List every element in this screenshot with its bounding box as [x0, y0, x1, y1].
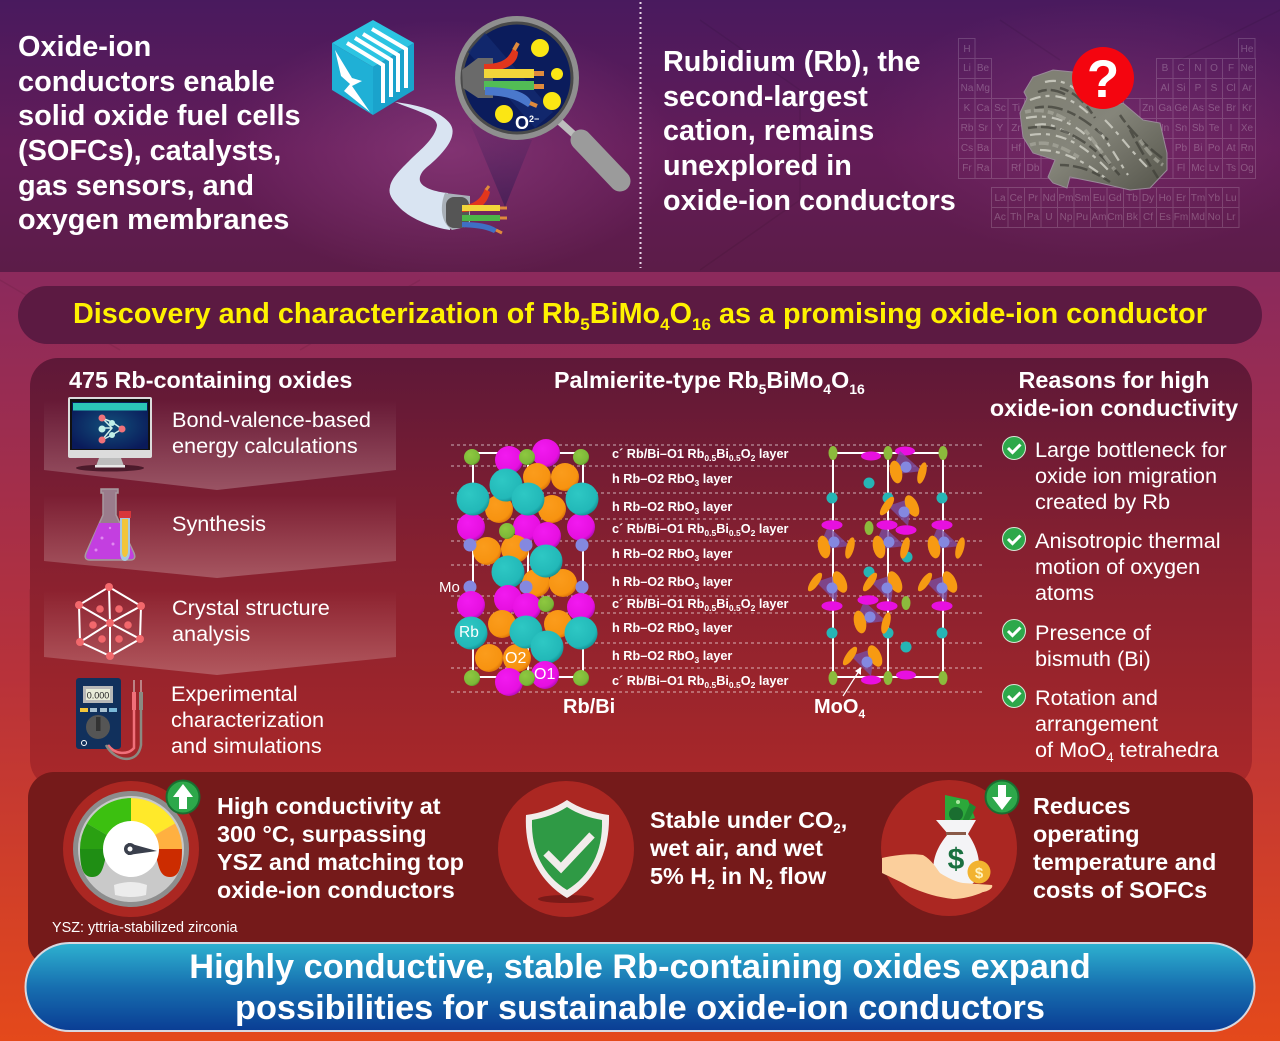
- periodic table: Po: [1208, 143, 1221, 154]
- periodic table: Ra: [977, 163, 990, 174]
- heading: oxide-ion conductors enable: oxygen membranes: [18, 204, 289, 236]
- title bar: BiMo: [590, 298, 660, 330]
- periodic table: Pa: [1027, 212, 1040, 223]
- periodic table: Ga: [1158, 103, 1172, 114]
- layer labels: 0.5: [729, 453, 741, 463]
- icon: fuel cell cable under magnifier: [332, 16, 620, 233]
- text: high conductivity: 300 °C, surpassing: [217, 821, 427, 847]
- heading: oxide-ion conductors enable: solid oxide fuel cells: [18, 100, 301, 132]
- magnifier handle: [560, 122, 620, 181]
- reason list: Presence of: [1035, 620, 1152, 645]
- layer labels: 0.5: [729, 528, 741, 538]
- text: bond-valence: [172, 407, 371, 458]
- small cable end: [442, 186, 507, 233]
- label: Rb/Bi: Rb/Bi: [563, 696, 615, 718]
- periodic table: Fm: [1174, 212, 1188, 223]
- text: bond-valence: energy calculations: [172, 433, 358, 458]
- periodic table: As: [1192, 103, 1204, 114]
- periodic table: I: [1230, 123, 1232, 134]
- red question mark badge: ?: [1087, 50, 1119, 109]
- reason list: created by Rb: [1035, 489, 1170, 514]
- text: stable: 5% H: [650, 863, 707, 889]
- main panel background: [30, 358, 1252, 788]
- layer labels: h Rb–O2 RbO: [612, 500, 694, 514]
- layer labels: O: [741, 522, 751, 536]
- periodic table: Rn: [1241, 143, 1253, 154]
- heading: oxide-ion conductors enable: [18, 31, 301, 236]
- title bar: Discovery and characterization of Rb: [73, 298, 580, 330]
- layer labels: 0.5: [704, 603, 716, 613]
- text: stable: 2: [833, 821, 841, 836]
- layer labels: O: [741, 674, 751, 688]
- text: stable: 2: [707, 877, 715, 892]
- text: reduces: temperature and: [1033, 849, 1216, 875]
- layer labels: layer: [699, 500, 732, 514]
- magnifier lens: [455, 16, 579, 140]
- periodic table: Li: [963, 63, 971, 74]
- reason list: of MoO: [1035, 737, 1106, 762]
- label: MoO4: MoO: [814, 696, 858, 718]
- reason list: arrangement: [1035, 711, 1158, 736]
- icon: multimeter: [76, 678, 143, 759]
- title bar: [18, 286, 1262, 344]
- text: high conductivity: oxide-ion conductors: [217, 877, 455, 903]
- step bands: [44, 400, 396, 675]
- layer labels: 2: [751, 528, 756, 538]
- layer labels: O: [741, 597, 751, 611]
- layer labels: layer: [755, 597, 789, 611]
- periodic table: He: [1241, 44, 1254, 55]
- periodic table: Ca: [977, 103, 990, 114]
- layer labels: c´ Rb/Bi–O1 Rb: [612, 674, 704, 688]
- title bar: 16: [692, 315, 711, 334]
- magnifier lens: O: [515, 113, 529, 133]
- periodic table: Ne: [1241, 63, 1254, 74]
- layer labels: h Rb–O2 RbO: [612, 472, 694, 486]
- periodic table: Be: [977, 63, 990, 74]
- chart: Rb/Bi crystal structure: [439, 439, 598, 696]
- layer labels: h Rb–O2 RbO: [612, 621, 694, 635]
- periodic table: Na: [961, 83, 974, 94]
- periodic table: Np: [1060, 212, 1073, 223]
- layer labels: 2: [751, 680, 756, 690]
- red question mark badge: [1072, 47, 1134, 109]
- text: reduces: [1033, 793, 1216, 903]
- heading: palmierite-type: O: [831, 367, 849, 393]
- periodic table: Tm: [1191, 193, 1205, 204]
- text: stable: Stable under CO: [650, 807, 833, 833]
- layer labels: [612, 447, 789, 690]
- heading: palmierite-type: Palmierite-type Rb: [554, 367, 759, 393]
- text: reduces: Reduces: [1033, 793, 1131, 819]
- icon: computer monitor: [68, 397, 152, 472]
- periodic table: Fr: [962, 163, 972, 174]
- layer labels: c´ Rb/Bi–O1 Rb: [612, 522, 704, 536]
- layer labels: h Rb–O2 RbO: [612, 575, 694, 589]
- periodic table: Gd: [1108, 193, 1122, 204]
- title bar: 5: [580, 315, 590, 334]
- text: reduces: operating: [1033, 821, 1140, 847]
- text: experimental characterization: characterization: [171, 707, 324, 732]
- panel: discovery workflow: [44, 367, 396, 759]
- layer labels: 3: [694, 553, 699, 563]
- periodic table: Bk: [1126, 212, 1139, 223]
- text: stable: 2: [765, 877, 773, 892]
- periodic table: Db: [1027, 163, 1040, 174]
- periodic table: Xe: [1241, 123, 1254, 134]
- heading: 475 Rb-containing oxides: 475 Rb-containing oxides: [69, 367, 352, 393]
- heading: oxide-ion conductors enable: conductors enable: [18, 66, 275, 98]
- periodic table: Lu: [1225, 193, 1237, 204]
- text: experimental characterization: Experimental: [171, 681, 298, 706]
- chart: Rb/Bi crystal structure: O2: [505, 650, 526, 667]
- reason list: [1035, 437, 1227, 765]
- periodic table: Dy: [1142, 193, 1154, 204]
- periodic table: La: [994, 193, 1006, 204]
- layer labels: 0.5: [704, 453, 716, 463]
- periodic table: Ge: [1174, 103, 1188, 114]
- reason list: Large bottleneck for: [1035, 437, 1227, 462]
- panel: palmierite structure: [439, 367, 983, 721]
- layer labels: layer: [699, 649, 732, 663]
- heading: rubidium: cation, remains: [663, 115, 874, 147]
- periodic table: Ho: [1159, 193, 1172, 204]
- heading: palmierite-type: 16: [849, 381, 865, 397]
- text: high conductivity: YSZ and matching top: [217, 849, 464, 875]
- text: stable: flow: [773, 863, 827, 889]
- layer labels: 3: [694, 478, 699, 488]
- title bar: 4: [660, 315, 670, 334]
- title bar: O: [670, 298, 692, 330]
- periodic table: Al: [1161, 83, 1169, 94]
- layer labels: layer: [755, 674, 789, 688]
- periodic table: [958, 38, 1256, 228]
- periodic table: P: [1195, 83, 1202, 94]
- layer labels: 3: [694, 581, 699, 591]
- periodic table: Mg: [976, 83, 990, 94]
- periodic table: Pb: [1175, 143, 1188, 154]
- layer labels: h Rb–O2 RbO: [612, 547, 694, 561]
- text: high conductivity: High conductivity at: [217, 793, 441, 819]
- layer labels: layer: [699, 621, 732, 635]
- periodic table: Es: [1159, 212, 1171, 223]
- icon: shield: [498, 781, 634, 917]
- icon: up arrow badge: [166, 780, 200, 814]
- text: crystal structure analysis: [172, 595, 330, 646]
- text: crystal structure analysis: analysis: [172, 621, 251, 646]
- conclusion banner: Highly conductive, stable Rb-containing oxides expand: [189, 948, 1091, 986]
- periodic table: Pm: [1058, 193, 1074, 204]
- periodic table: Lr: [1227, 212, 1236, 223]
- periodic table: Og: [1240, 163, 1254, 174]
- layer labels: layer: [699, 575, 732, 589]
- layer labels: 2: [751, 603, 756, 613]
- periodic table: Zn: [1142, 103, 1154, 114]
- reason list: bismuth (Bi): [1035, 646, 1151, 671]
- layer labels: Bi: [716, 447, 729, 461]
- heading: oxide-ion conductors enable: gas sensors, and: [18, 170, 254, 202]
- periodic table: O: [1210, 63, 1218, 74]
- periodic table: Kr: [1242, 103, 1253, 114]
- periodic table: Ti: [1012, 103, 1020, 114]
- icon: crystal structure: [75, 583, 145, 660]
- periodic table: B: [1162, 63, 1169, 74]
- layer labels: 3: [694, 627, 699, 637]
- conclusion banner: possibilities for sustainable oxide-ion conductors: [235, 989, 1045, 1027]
- periodic table: Cs: [961, 143, 973, 154]
- reason list: Rotation and: [1035, 685, 1158, 710]
- chart: Rb/Bi crystal structure: Mo: [439, 579, 460, 596]
- heading: reasons: Reasons for high: [1018, 367, 1210, 393]
- text: stable: ,: [841, 807, 847, 833]
- text: stable: wet air, and wet: [649, 835, 823, 861]
- periodic table: Lv: [1209, 163, 1219, 174]
- chart: MoO4 thermal ellipsoids: [805, 446, 967, 685]
- periodic table: Sb: [1192, 123, 1205, 134]
- periodic table: Nd: [1043, 193, 1055, 204]
- periodic table: Ar: [1242, 83, 1253, 94]
- text: experimental characterization: and simulations: [171, 733, 322, 758]
- text: synthesis: Synthesis: [172, 511, 266, 536]
- periodic table: Sn: [1175, 123, 1187, 134]
- rubidium metal lump: [1020, 70, 1167, 190]
- periodic table: Si: [1177, 83, 1185, 94]
- periodic table: Md: [1191, 212, 1205, 223]
- reason list: oxide ion migration: [1035, 463, 1217, 488]
- vertical dotted divider: [640, 2, 642, 268]
- periodic table: Ce: [1010, 193, 1023, 204]
- periodic table: At: [1226, 143, 1236, 154]
- periodic table: Eu: [1093, 193, 1105, 204]
- text: experimental characterization: [171, 681, 324, 758]
- periodic table: Cf: [1143, 212, 1153, 223]
- layer labels: layer: [755, 447, 789, 461]
- layer labels: O: [741, 447, 751, 461]
- top banner background: [0, 0, 1280, 280]
- periodic table: Ba: [977, 143, 990, 154]
- layer labels: layer: [699, 472, 732, 486]
- text: bond-valence: Bond-valence-based: [172, 407, 371, 432]
- heading: rubidium: Rubidium (Rb), the: [663, 46, 921, 78]
- heading: palmierite-type: 4: [823, 381, 831, 397]
- periodic table: S: [1211, 83, 1218, 94]
- periodic table: Yb: [1208, 193, 1221, 204]
- heading: palmierite-type: BiMo: [766, 367, 823, 393]
- periodic table: Sr: [978, 123, 989, 134]
- chart: Rb/Bi crystal structure: Rb: [459, 624, 479, 641]
- heading: reasons: oxide-ion conductivity: [990, 395, 1238, 421]
- layer labels: Bi: [716, 522, 729, 536]
- layer labels: 3: [694, 506, 699, 516]
- reason list: tetrahedra: [1114, 737, 1219, 762]
- heading: palmierite-type: 5: [759, 381, 767, 397]
- conclusion banner: [26, 943, 1254, 1031]
- heading: rubidium: oxide-ion conductors: [663, 185, 956, 217]
- layer labels: Bi: [716, 674, 729, 688]
- periodic table: C: [1177, 63, 1185, 74]
- magnifier lens: 2−: [529, 114, 539, 124]
- icon: multimeter: 0.000: [87, 690, 109, 700]
- reason list: 4: [1106, 750, 1114, 765]
- tetrahedra type A: [816, 520, 857, 560]
- check icons: [1002, 436, 1026, 708]
- periodic table: Bi: [1194, 143, 1202, 154]
- periodic table: Cm: [1107, 212, 1123, 223]
- layer labels: c´ Rb/Bi–O1 Rb: [612, 597, 704, 611]
- periodic table: Y: [997, 123, 1004, 134]
- light beam: [470, 123, 532, 207]
- text: reduces: costs of SOFCs: [1033, 877, 1207, 903]
- layer labels: 0.5: [704, 528, 716, 538]
- periodic table: Tb: [1126, 193, 1138, 204]
- periodic table: Fl: [1177, 163, 1185, 174]
- periodic table: Te: [1209, 123, 1220, 134]
- periodic table: Th: [1010, 212, 1022, 223]
- cable sheath: [389, 102, 453, 230]
- layer labels: 0.5: [729, 680, 741, 690]
- layer labels: layer: [699, 547, 732, 561]
- periodic table: Rb: [961, 123, 974, 134]
- icon: money bag on hand: $: [948, 843, 965, 876]
- periodic table: Sc: [994, 103, 1006, 114]
- heading: reasons: [990, 367, 1238, 421]
- fuel cell cube: [332, 20, 414, 115]
- reason list: Anisotropic thermal: [1035, 528, 1221, 553]
- periodic table: H: [963, 44, 971, 55]
- icon: speedometer: [63, 781, 199, 917]
- periodic table: F: [1228, 63, 1234, 74]
- chart: Rb/Bi crystal structure: O1: [534, 666, 555, 683]
- title bar: as a promising oxide-ion conductor: [711, 298, 1207, 330]
- layer labels: 2: [751, 453, 756, 463]
- periodic table: Pr: [1028, 193, 1039, 204]
- text: stable: in N: [715, 863, 765, 889]
- panel: outcomes: [28, 772, 1253, 967]
- heading: oxide-ion conductors enable: Oxide-ion: [18, 31, 151, 63]
- periodic table: K: [964, 103, 971, 114]
- layer labels: 0.5: [704, 680, 716, 690]
- periodic table: U: [1045, 212, 1053, 223]
- layer labels: h Rb–O2 RbO: [612, 649, 694, 663]
- layer labels: 0.5: [729, 603, 741, 613]
- periodic table: In: [1161, 123, 1169, 134]
- layer labels: Bi: [716, 597, 729, 611]
- icon: money bag on hand: [881, 780, 1017, 916]
- heading: rubidium: second-largest: [663, 81, 868, 113]
- footnote: YSZ: YSZ: yttria-stabilized zirconia: [52, 920, 238, 936]
- panel: reasons for high conductivity: [990, 367, 1238, 765]
- text: high conductivity: [217, 793, 464, 903]
- periodic table: Er: [1176, 193, 1187, 204]
- icon: down arrow badge: [986, 780, 1018, 814]
- heading: rubidium: [663, 46, 956, 217]
- periodic table: Br: [1226, 103, 1237, 114]
- periodic table: No: [1208, 212, 1221, 223]
- periodic table: Pu: [1076, 212, 1088, 223]
- layer labels: 3: [694, 655, 699, 665]
- reason list: atoms: [1035, 580, 1094, 605]
- periodic table: Zr: [1011, 123, 1021, 134]
- arrow: MoO4 pointer: [843, 667, 861, 696]
- tetrahedra type B: [805, 569, 850, 611]
- periodic table: Se: [1208, 103, 1221, 114]
- layer labels: c´ Rb/Bi–O1 Rb: [612, 447, 704, 461]
- periodic table: Rf: [1011, 163, 1021, 174]
- periodic table: Sm: [1074, 193, 1090, 204]
- layer dashed lines: [451, 445, 983, 692]
- text: crystal structure analysis: Crystal structure: [172, 595, 330, 620]
- periodic table: Hf: [1011, 143, 1021, 154]
- icon: money bag on hand: $: [975, 865, 984, 882]
- reason list: motion of oxygen: [1035, 554, 1200, 579]
- text: stable: [649, 807, 847, 892]
- periodic table: Am: [1092, 212, 1106, 223]
- heading: rubidium: unexplored in: [663, 150, 852, 182]
- periodic table: Ts: [1226, 163, 1236, 174]
- periodic table: Ac: [994, 212, 1006, 223]
- label: MoO4: 4: [858, 707, 865, 721]
- periodic table: N: [1194, 63, 1202, 74]
- periodic table: Cl: [1226, 83, 1236, 94]
- layer labels: layer: [755, 522, 789, 536]
- heading: oxide-ion conductors enable: (SOFCs), catalysts,: [18, 135, 281, 167]
- periodic table: Mc: [1191, 163, 1205, 174]
- icon: flask and test tube: [85, 489, 135, 561]
